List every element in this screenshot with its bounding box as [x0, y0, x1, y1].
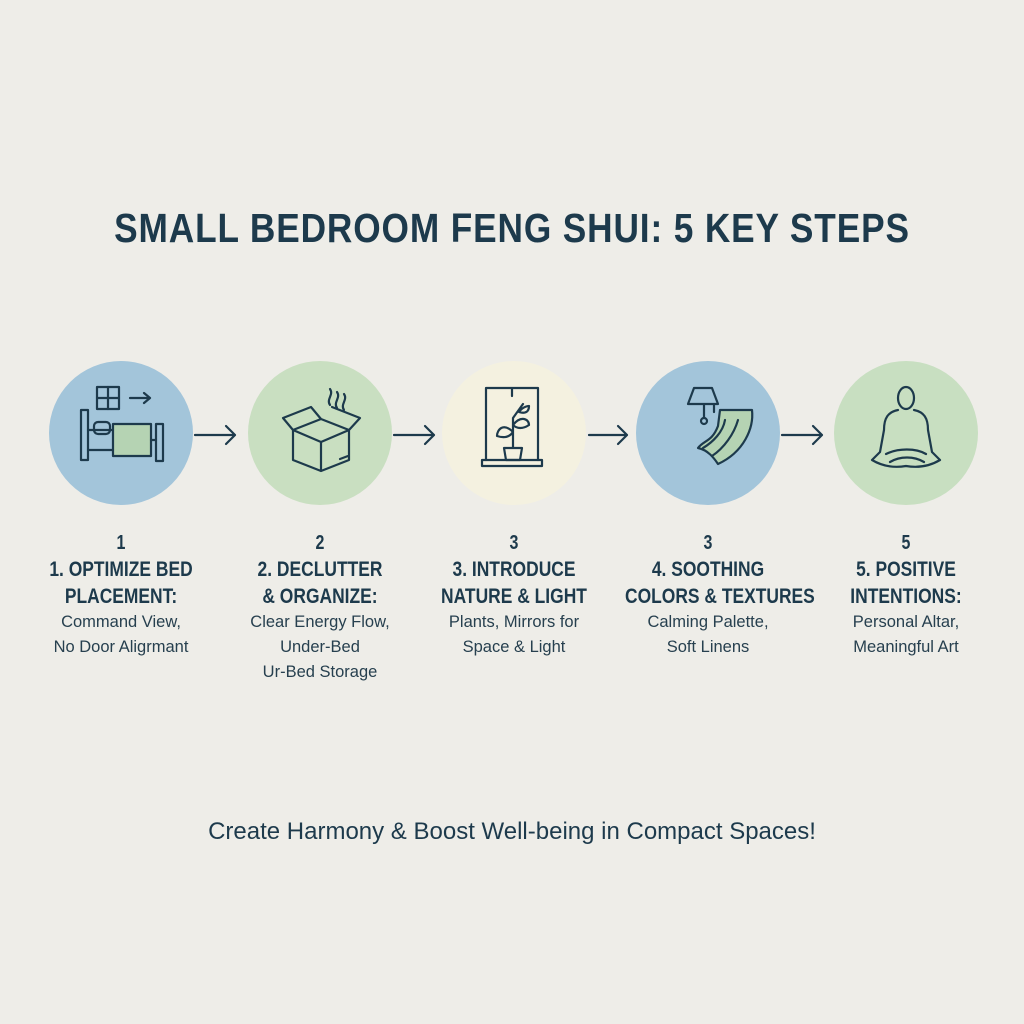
- step 4 text: 3: [704, 532, 712, 554]
- step 5 text: Meaningful Art: [853, 638, 959, 656]
- step 5 text: INTENTIONS:: [850, 585, 962, 608]
- step 1 text: 1. OPTIMIZE BED: [49, 558, 193, 581]
- step 1 text: No Door Aligrmant: [54, 638, 188, 656]
- step 1 text: 1: [117, 532, 125, 554]
- step 3 text: 3. INTRODUCE: [453, 558, 575, 581]
- step 5 icon: meditation: [834, 361, 978, 505]
- footer tagline: Create Harmony & Boost Well-being in Compact Spaces!: [208, 818, 816, 845]
- step 1 text: [49, 532, 193, 656]
- title: SMALL BEDROOM FENG SHUI: 5 KEY STEPS: [114, 205, 910, 251]
- step 4 text: Calming Palette,: [647, 613, 769, 631]
- step 2 text: Under-Bed: [280, 638, 360, 656]
- step 4 text: Soft Linens: [667, 638, 749, 656]
- step 3 text: 3: [510, 532, 518, 554]
- step 4 icon: lamp and linen: [636, 361, 780, 505]
- arrow 3: [589, 426, 627, 444]
- step 4 text: 4. SOOTHING: [652, 558, 764, 581]
- step 5 text: [850, 532, 962, 656]
- step 5 text: Personal Altar,: [853, 613, 959, 631]
- step 3 icon: plant in window: [442, 361, 586, 505]
- step 2 text: Clear Energy Flow,: [250, 613, 390, 631]
- arrow 1: [195, 426, 235, 444]
- arrow 4: [782, 426, 822, 444]
- step 5 text: 5: [902, 532, 910, 554]
- arrow 2: [394, 426, 434, 444]
- step 3 text: [441, 532, 587, 656]
- step 3 text: Space & Light: [463, 638, 565, 656]
- step 1 text: Command View,: [61, 613, 181, 631]
- step 2 text: [250, 532, 390, 681]
- step 1 text: PLACEMENT:: [65, 585, 177, 608]
- step 3 text: NATURE & LIGHT: [441, 585, 587, 608]
- step 2 text: 2: [316, 532, 324, 554]
- step 4 text: [625, 532, 815, 656]
- step 2 text: Ur-Bed Storage: [263, 663, 377, 681]
- step 2 text: & ORGANIZE:: [262, 585, 378, 608]
- step 2 icon: box: [248, 361, 392, 505]
- step 3 text: Plants, Mirrors for: [449, 613, 579, 631]
- step 1 icon: bed placement: [49, 361, 193, 505]
- step 2 text: 2. DECLUTTER: [258, 558, 382, 581]
- step 4 text: COLORS & TEXTURES: [625, 585, 815, 608]
- step 5 text: 5. POSITIVE: [856, 558, 956, 581]
